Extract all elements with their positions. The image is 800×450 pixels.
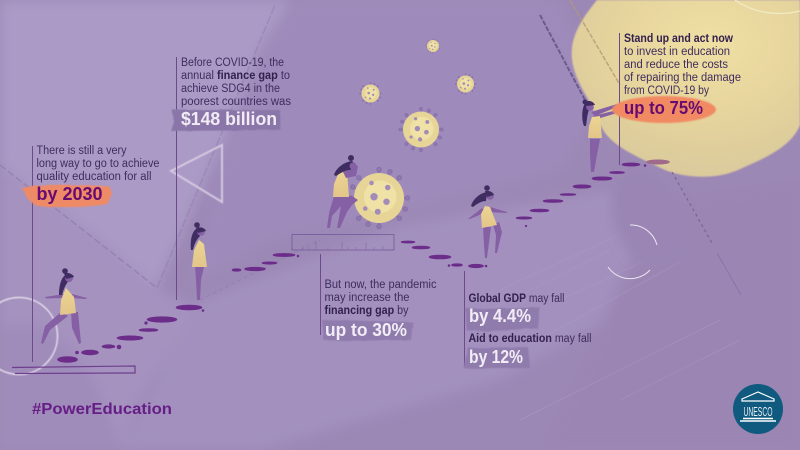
- callout: pandemic financing gap: But now, the pandemic: [324, 279, 437, 291]
- callout: stand up and act now: [612, 33, 741, 123]
- footprints path: [58, 160, 670, 362]
- callout: finance gap: Before COVID-19, the: [181, 57, 284, 69]
- callout: finance gap: annual finance gap to: [181, 70, 290, 82]
- virus: small left: [360, 83, 381, 104]
- brush highlight: [322, 320, 413, 341]
- platform bar bottom left: [12, 366, 135, 374]
- virus: small right: [455, 74, 476, 94]
- callout: stand up and act now: and reduce the costs: [624, 59, 728, 71]
- hill shadow: [613, 170, 690, 265]
- callout: GDP and aid: Aid to education may fall: [468, 333, 592, 345]
- UNESCO logo: [733, 384, 783, 434]
- virus: small top: [426, 39, 440, 53]
- callout: pandemic financing gap: up to 30%: [325, 320, 407, 340]
- virus: medium: [399, 108, 443, 151]
- orange brush highlight: [22, 185, 113, 207]
- thin white arcs: [608, 225, 657, 279]
- callout: pandemic financing gap: may increase the: [324, 292, 410, 304]
- callout: pandemic financing gap: financing gap by: [324, 305, 409, 317]
- callout: long way to go: There is still a very: [36, 145, 127, 157]
- brush highlight: aid: [464, 347, 530, 369]
- callout: long way to go: by 2030: [36, 184, 102, 204]
- callout: finance gap: $148 billion: [181, 109, 277, 129]
- callout: stand up and act now: to invest in education: [624, 46, 730, 58]
- callout: stand up and act now: from COVID-19 by: [624, 85, 709, 97]
- callout: GDP and aid: [464, 293, 592, 369]
- figure 4: stepping down: [468, 185, 507, 258]
- hatched rope lines across the sun: [540, 0, 800, 295]
- virus: large pushed: [349, 168, 409, 228]
- ruler platform: [292, 234, 394, 250]
- callout: long way to go: [22, 145, 160, 207]
- callout: finance gap: [171, 57, 291, 131]
- UNESCO logo: UNESCO: [744, 404, 772, 419]
- callout: long way to go: quality education for all: [36, 171, 152, 183]
- hashtag: #PowerEducation: [32, 401, 172, 418]
- outline circle: bottom left: [0, 298, 58, 374]
- figure 1: walking: [41, 268, 87, 344]
- callout: GDP and aid: by 12%: [469, 347, 523, 367]
- callout: pandemic financing gap: [322, 279, 437, 341]
- callout: GDP and aid: Global GDP may fall: [468, 293, 564, 305]
- figure 2: standing: [191, 222, 207, 300]
- dark brush highlight: [171, 110, 281, 131]
- figure 3: pushing the virus: [327, 155, 358, 228]
- callout: finance gap: poorest countries was: [181, 96, 291, 108]
- figure 5: reaching: [582, 100, 617, 172]
- callout: finance gap: achieve SDG4 in the: [181, 83, 280, 95]
- callout: stand up and act now: up to 75%: [624, 98, 703, 118]
- orange ellipse highlight: [612, 96, 716, 123]
- callout: stand up and act now: of repairing the damage: [624, 72, 741, 84]
- brush highlight: GDP: [466, 308, 540, 331]
- callout: long way to go: long way to go to achieve: [36, 158, 160, 170]
- leader lines: [32, 33, 620, 366]
- callout: GDP and aid: by 4.4%: [469, 306, 531, 326]
- outline triangle: [171, 145, 222, 202]
- yellow sun blob: [572, 0, 800, 177]
- callout: stand up and act now: Stand up and act now: [624, 33, 733, 45]
